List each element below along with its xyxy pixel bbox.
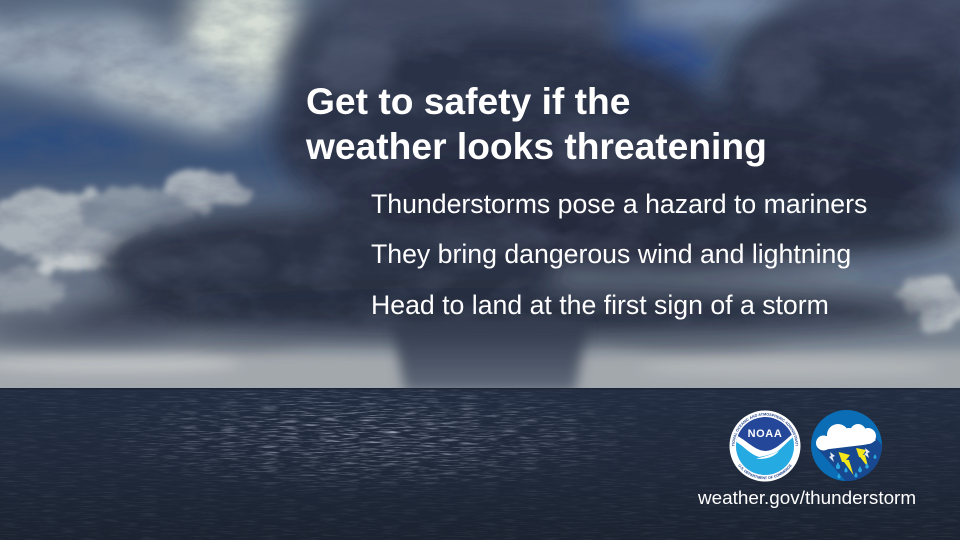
cloud detail streaks [110,32,820,278]
icon: NOAA logo: NOAA [748,428,782,440]
icon: NOAA logo [730,410,800,482]
point 1: Thunderstorms pose a hazard to mariners [371,189,867,219]
sea [0,388,960,540]
website link: weather.gov/thunderstorm [698,487,916,508]
lightning bolts [838,452,854,475]
upper right sky and clouds [586,0,960,282]
rain drops [836,454,876,478]
title: weather looks threatening [306,125,767,167]
icon: NOAA logo: U.S. DEPARTMENT OF COMMERCE [738,464,792,480]
cloud texture [0,0,960,335]
left cumulus band [0,168,960,326]
title [306,80,767,167]
horizon light band [0,342,960,400]
upper left clouds and sky [0,0,307,168]
point 3: Head to land at the first sign of a storm [371,290,829,320]
cloud [816,424,876,450]
title: Get to safety if the [306,80,630,122]
rain shaft [392,322,588,392]
text block: safety points [371,189,867,320]
point 2: They bring dangerous wind and lightning [371,239,851,269]
main dark storm cloud [0,0,960,340]
icon: thunderstorm cloud [811,410,882,481]
